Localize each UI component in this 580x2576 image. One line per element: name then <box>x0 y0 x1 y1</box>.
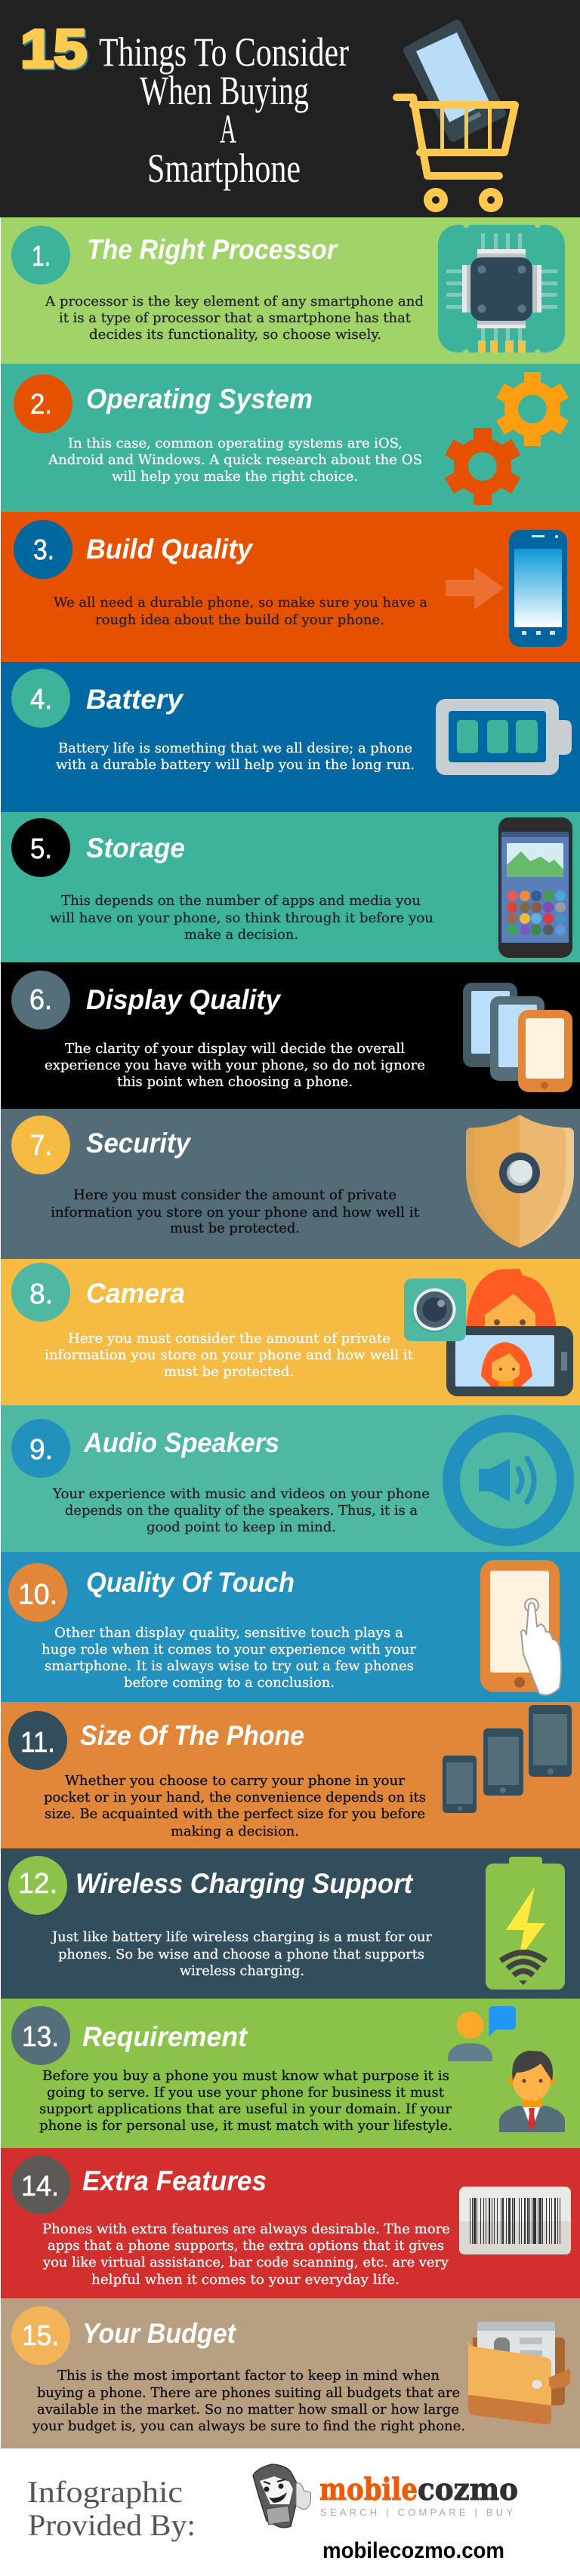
text 3 <box>54 595 427 628</box>
icon: battery <box>436 699 572 775</box>
number badge 13: 13. <box>22 2021 59 2053</box>
text 3: We all need a durable phone, so make sure you have a <box>54 595 427 611</box>
text 1: A processor is the key element of any smartphone and <box>45 294 424 309</box>
text 14: helpful when it comes to your everyday life. <box>91 2272 400 2288</box>
text 12 <box>51 1929 432 1979</box>
icon: selfie phone and camera <box>404 1269 573 1396</box>
panel: 14 extra features <box>1 2148 580 2298</box>
text 8 <box>45 1331 414 1380</box>
title text: Things To Consider <box>99 29 349 75</box>
text 15: This is the most important factor to keep in mind when <box>57 2368 440 2384</box>
number badge 11 <box>8 1711 67 1770</box>
logo wordmark: mobile <box>319 2472 418 2507</box>
text 11 <box>44 1773 426 1839</box>
number badge 6: 6. <box>29 984 52 1016</box>
text 10: huge role when it comes to your experience with your <box>42 1642 416 1657</box>
heading 10: Quality Of Touch <box>86 1567 295 1598</box>
number badge 1 <box>11 226 70 285</box>
text 1 <box>45 294 424 343</box>
text 6: experience you have with your phone, so do not ignore <box>45 1057 425 1073</box>
text 7: must be protected. <box>170 1220 300 1236</box>
text 10 <box>42 1625 416 1691</box>
number badge 15 <box>11 2307 70 2365</box>
number badge 15: 15. <box>22 2320 59 2352</box>
heading 2: Operating System <box>86 383 313 414</box>
website: mobilecozmo.com <box>322 2538 504 2563</box>
text 5: This depends on the number of apps and media you <box>61 893 421 909</box>
text 5: make a decision. <box>184 927 298 943</box>
icon: phone <box>509 530 567 647</box>
text 6: The clarity of your display will decide the overall <box>65 1041 405 1057</box>
text 9: good point to keep in mind. <box>147 1519 336 1535</box>
heading 5: Storage <box>86 833 185 863</box>
heading 11: Size Of The Phone <box>80 1720 304 1751</box>
number badge 4: 4. <box>30 684 52 716</box>
text 2: Android and Windows. A quick research about the OS <box>48 452 422 468</box>
text 2 <box>48 435 422 485</box>
text 11: pocket or in your hand, the convenience depends on its <box>44 1790 426 1805</box>
text 10: smartphone. It is always wise to try out a few phones <box>45 1658 414 1674</box>
title text: A <box>220 106 236 152</box>
number badge 14: 14. <box>21 2171 59 2202</box>
text 13: support applications that are useful in your domain. If your <box>39 2101 452 2117</box>
icon: shield <box>466 1115 574 1248</box>
text 7: information you store on your phone and how well it <box>51 1205 420 1220</box>
panel: 13 requirement <box>1 1999 580 2148</box>
text 5: will have on your phone, so think through it before you <box>50 910 433 926</box>
text 9: Your experience with music and videos on your phone <box>52 1486 430 1502</box>
text 1: decides its functionality, so choose wisely. <box>89 327 381 343</box>
number badge 8 <box>11 1263 70 1322</box>
number badge 2 <box>14 374 72 433</box>
text 13 <box>39 2068 452 2134</box>
title text: When Buying <box>140 68 309 113</box>
heading 14: Extra Features <box>82 2165 267 2196</box>
text 6 <box>45 1041 425 1090</box>
heading 7: Security <box>86 1128 192 1159</box>
number badge 5: 5. <box>30 833 52 865</box>
text 15: available in the market. So no matter how small or how large <box>37 2402 459 2418</box>
icon: processor chip <box>438 222 565 355</box>
text 8: Here you must consider the amount of private <box>68 1331 390 1346</box>
number badge 3: 3. <box>33 534 54 566</box>
text 9 <box>52 1486 430 1535</box>
header panel <box>0 0 580 217</box>
text 10: before coming to a conclusion. <box>124 1675 335 1691</box>
panel: 2 operating system <box>1 364 580 512</box>
text 6: this point when choosing a phone. <box>117 1074 353 1090</box>
panel: 1 the right processor <box>1 217 580 364</box>
number badge 11: 11. <box>20 1727 55 1759</box>
icon: phone with apps <box>498 817 572 958</box>
provided by text <box>27 2475 196 2542</box>
heading 3: Build Quality <box>86 534 254 565</box>
text 12: wireless charging. <box>180 1963 304 1979</box>
heading 12: Wireless Charging Support <box>76 1868 414 1899</box>
panel: 6 display quality <box>1 962 580 1109</box>
panel: 12 wireless charging support <box>1 1848 580 1999</box>
text 2: will help you make the right choice. <box>112 469 358 485</box>
text 11: Whether you choose to carry your phone in your <box>65 1773 405 1789</box>
text 7: Here you must consider the amount of private <box>73 1187 396 1203</box>
number badge 10: 10. <box>18 1579 57 1611</box>
logo wordmark: cozmo <box>418 2472 518 2507</box>
number badge 12: 12. <box>18 1868 57 1900</box>
icon: wallet <box>468 2322 570 2424</box>
number badge 4 <box>11 669 70 728</box>
text 14: you like virtual assistance, bar code scanning, etc. are very <box>42 2254 449 2270</box>
text 4: with a durable battery will help you in the long run. <box>56 757 415 773</box>
panel: 15 your budget <box>1 2298 580 2448</box>
text 13: phone is for personal use, it must match with your lifestyle. <box>39 2118 452 2134</box>
provided by text: Provided By: <box>28 2508 196 2542</box>
heading 6: Display Quality <box>86 984 282 1015</box>
icon: phone in shopping cart <box>396 24 515 208</box>
icon: phone mascot logo <box>253 2464 311 2528</box>
text 11: making a decision. <box>171 1824 299 1839</box>
panel: 5 storage <box>1 812 580 962</box>
number badge 12 <box>8 1856 67 1915</box>
text 8: information you store on your phone and how well it <box>45 1347 414 1363</box>
icon: people talking <box>448 2006 565 2132</box>
title: 15: 15 <box>22 21 88 81</box>
text 14: Phones with extra features are always desirable. The more <box>42 2221 450 2237</box>
title text <box>99 29 349 191</box>
text 4: Battery life is something that we all desire; a phone <box>58 740 412 756</box>
number badge 8: 8. <box>29 1279 53 1310</box>
text 5 <box>50 893 433 943</box>
number badge 9 <box>11 1419 70 1478</box>
text 9: depends on the quality of the speakers. Thus, it is a <box>65 1503 418 1519</box>
text 15: buying a phone. There are phones suiting all budgets that are <box>37 2385 460 2401</box>
text 2: In this case, common operating systems are iOS, <box>68 435 403 451</box>
title text: Smartphone <box>147 146 301 191</box>
text 8: must be protected. <box>164 1364 294 1380</box>
text 14: apps that a phone supports, the extra options that it gives <box>48 2238 444 2254</box>
text 13: going to serve. If you use your phone for business it must <box>47 2085 445 2101</box>
panel: 10 quality of touch <box>1 1552 580 1702</box>
icon: speaker <box>452 1423 565 1537</box>
logo wordmark <box>319 2472 518 2507</box>
icon: three phones <box>463 983 572 1092</box>
number badge 3 <box>14 520 72 579</box>
number badge 10 <box>8 1563 67 1622</box>
panel: 9 audio speakers <box>1 1405 580 1552</box>
heading 13: Requirement <box>82 2021 248 2052</box>
number badge 9: 9. <box>29 1434 53 1466</box>
text 15: your budget is, you can always be sure to find the right phone. <box>32 2418 465 2434</box>
number badge 6 <box>11 971 70 1029</box>
heading 15: Your Budget <box>82 2318 237 2349</box>
panel: 4 battery <box>1 662 580 812</box>
icon: touch phone <box>480 1560 561 1695</box>
heading 4: Battery <box>86 684 184 715</box>
text 14 <box>42 2221 450 2288</box>
provided by text: Infographic <box>27 2475 183 2509</box>
logo tagline: SEARCH | COMPARE | BUY <box>320 2507 513 2518</box>
number badge 1: 1. <box>32 241 51 272</box>
text 10: Other than display quality, sensitive touch plays a <box>54 1625 403 1641</box>
number badge 7: 7. <box>30 1130 52 1162</box>
text 1: it is a type of processor that a smartphone has that <box>59 310 412 326</box>
panel: 3 build quality <box>1 512 580 662</box>
number badge 13 <box>11 2006 70 2065</box>
icon: barcode <box>459 2187 571 2254</box>
title: 15: 15 <box>20 20 87 79</box>
heading 1: The Right Processor <box>87 234 338 265</box>
panel: 11 size of the phone <box>1 1702 580 1848</box>
icon: wireless charging battery <box>486 1857 565 1990</box>
number badge 7 <box>11 1116 70 1174</box>
text 12: Just like battery life wireless charging is a must for our <box>51 1929 432 1945</box>
icon: arrow <box>446 567 504 610</box>
number badge 5 <box>11 818 70 877</box>
text 11: size. Be acquainted with the perfect size for you before <box>45 1806 425 1822</box>
text 4 <box>56 740 415 773</box>
heading 9: Audio Speakers <box>83 1427 279 1458</box>
footer panel <box>27 2464 518 2563</box>
text 15 <box>32 2368 465 2434</box>
text 13: Before you buy a phone you must know what purpose it is <box>42 2068 449 2084</box>
icon: gears <box>445 372 569 505</box>
panel: 8 camera <box>1 1259 580 1405</box>
panel: 7 security <box>1 1109 580 1259</box>
text 7 <box>51 1187 420 1236</box>
text 3: rough idea about the build of your phone. <box>95 612 384 628</box>
icon: phones of three sizes <box>443 1705 572 1813</box>
heading 8: Camera <box>86 1278 185 1309</box>
number badge 2: 2. <box>30 389 52 420</box>
text 12: phones. So be wise and choose a phone that supports <box>58 1947 424 1962</box>
number badge 14 <box>11 2156 70 2214</box>
